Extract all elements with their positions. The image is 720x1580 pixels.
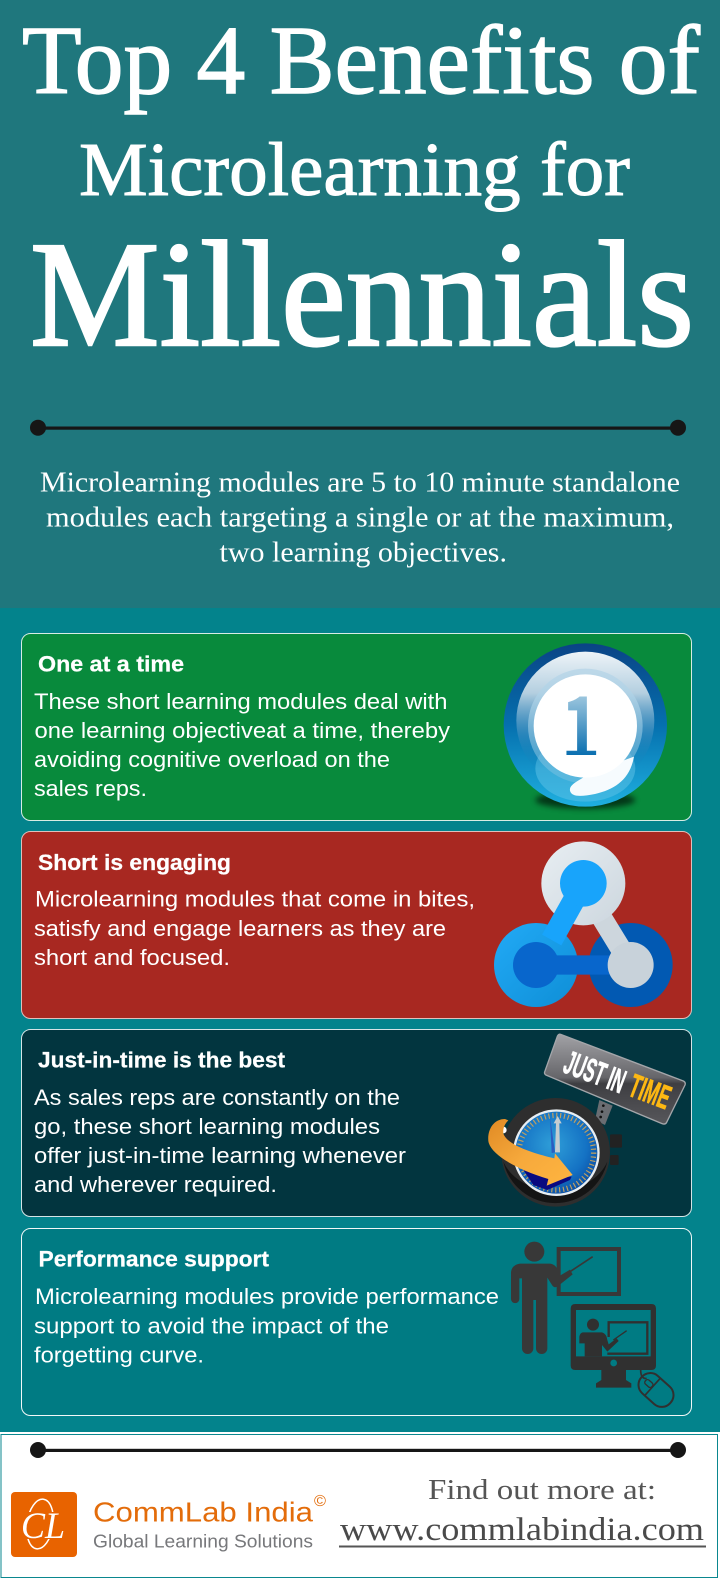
- footer divider line: [30, 1442, 686, 1458]
- intro text: [40, 468, 680, 568]
- heading: short is engaging: Short is engaging: [38, 850, 231, 875]
- logo wordmark: CommLab India: [93, 1496, 313, 1528]
- icon: connected nodes: [494, 841, 673, 1007]
- logo tagline: Global Learning Solutions: [93, 1532, 313, 1552]
- body text: one at a time: one learning objectiveat a time, thereby: [34, 718, 451, 743]
- body text: performance support: [34, 1284, 499, 1368]
- heading: one at a time: One at a time: [38, 652, 184, 676]
- body text: one at a time: [34, 689, 451, 801]
- body text: short is engaging: Microlearning modules that come in bites,: [35, 886, 475, 912]
- website url: www.commlabindia.com: [340, 1512, 704, 1548]
- logo mark: CL: [21, 1506, 65, 1547]
- body text: short is engaging: short and focused.: [34, 945, 230, 970]
- body text: just-in-time is the best: offer just-in-time learning whenever: [34, 1143, 407, 1168]
- logo mark: [11, 1492, 77, 1557]
- find out more text: Find out more at:: [428, 1474, 656, 1506]
- heading: performance support: Performance support: [38, 1246, 270, 1272]
- body text: just-in-time is the best: go, these short learning modules: [34, 1114, 380, 1139]
- header divider line: [30, 420, 686, 436]
- heading: just-in-time is the best: Just-in-time is the best: [38, 1048, 286, 1072]
- title: [22, 7, 701, 378]
- body text: one at a time: These short learning modules deal with: [34, 689, 448, 714]
- body text: performance support: support to avoid the impact of the: [34, 1314, 389, 1338]
- icon: just in time clock: [488, 1034, 685, 1207]
- icon: number one speech bubble: 1: [561, 658, 600, 788]
- icon: number one speech bubble: [504, 643, 667, 809]
- panel: just-in-time is the best: [22, 1030, 692, 1216]
- title: Microlearning for: [79, 128, 630, 212]
- intro text: Microlearning modules are 5 to 10 minute standalone: [40, 468, 680, 498]
- sign: JUST IN: [559, 1045, 631, 1101]
- body text: just-in-time is the best: As sales reps are constantly on the: [34, 1085, 400, 1110]
- body text: just-in-time is the best: [34, 1085, 407, 1197]
- body text: short is engaging: [34, 886, 475, 970]
- body text: performance support: Microlearning modules provide performance: [35, 1284, 499, 1309]
- body text: one at a time: sales reps.: [34, 776, 147, 801]
- logo copyright mark: ©: [314, 1493, 326, 1510]
- intro text: two learning objectives.: [220, 538, 507, 568]
- icon: presenter and monitor: [511, 1242, 678, 1412]
- body text: just-in-time is the best: and wherever required.: [34, 1172, 277, 1197]
- intro text: modules each targeting a single or at the maximum,: [46, 502, 674, 534]
- logo: CommLab India: [11, 1492, 326, 1557]
- body text: performance support: forgetting curve.: [34, 1342, 204, 1368]
- page background: [0, 608, 720, 1432]
- title: Millennials: [30, 210, 694, 378]
- header panel: [0, 0, 720, 608]
- body text: one at a time: avoiding cognitive overload on the: [34, 747, 390, 772]
- panel: short is engaging: [22, 832, 692, 1018]
- body text: short is engaging: satisfy and engage learners as they are: [34, 916, 446, 941]
- footer panel: [0, 1432, 720, 1580]
- sign: TIME: [624, 1068, 676, 1117]
- panel: one at a time: [22, 634, 692, 820]
- panel: performance support: [22, 1228, 692, 1416]
- title: Top 4 Benefits of: [22, 7, 701, 114]
